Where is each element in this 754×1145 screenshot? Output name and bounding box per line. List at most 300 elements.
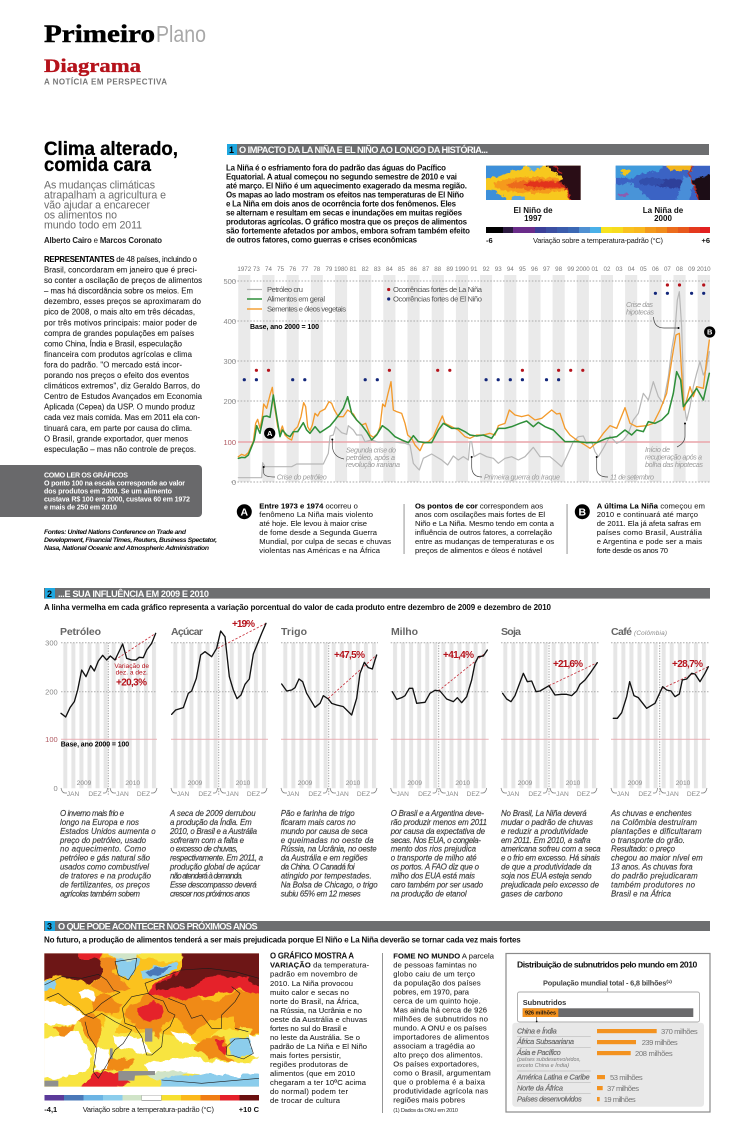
text: Açúcar: não atenderá à demanda. — [170, 871, 243, 880]
text: Açúcar — [169, 809, 264, 898]
year labels: 97 — [543, 266, 550, 273]
intro text: La Niña e El Niño: se alternam e resultam em secas e inundações em muitas regiões — [226, 208, 463, 217]
sources: Nasa, National Oceanic and Atmospheric Administration — [44, 545, 209, 552]
intro text: La Niña e El Niño — [226, 164, 470, 244]
legend: series — [247, 285, 346, 314]
text: Soja: prejudicada pelo excesso de — [500, 880, 600, 889]
text: Café: na Colômbia destruíram — [611, 818, 697, 827]
text: Trigo: subiu 65% em 12 meses — [281, 889, 361, 898]
chart: Petróleo: DEZ — [88, 791, 102, 798]
chart: Trigo: JAN — [336, 791, 349, 798]
year labels: 86 — [410, 266, 418, 273]
text: Milho: mento dos rios prejudica — [391, 845, 477, 854]
article body: REPRESENTANTES de 48 países, incluindo o — [44, 255, 198, 264]
chart: Soja: Soja — [501, 626, 521, 638]
chart: Trigo: +47,5% — [334, 650, 365, 661]
article body: Aplicada (Cepea) da USP. O mundo produz — [44, 403, 195, 412]
map labels — [513, 206, 684, 223]
text: o gráfico mostra a variação: VARIAÇÃO da temperatura- — [270, 961, 369, 970]
chart: Açúcar: DEZ — [198, 791, 212, 798]
text: fome no mundo: alto preço dos alimentos. — [393, 1051, 483, 1060]
text: Açúcar: crescer nos próximos anos — [170, 889, 250, 898]
panel: como ler os gráficos: O ponto 100 na escala corresponde ao valor — [44, 480, 185, 488]
annotation: primeira guerra do Iraque: Primeira guerra do Iraque — [484, 472, 560, 482]
text: fome no mundo — [382, 952, 495, 1114]
note: pontos de cor: preços de alimentos e óleos é notável — [415, 546, 542, 555]
text: Café: também produtores no — [611, 880, 696, 889]
color legend: world map: -4,1 — [44, 1105, 57, 1114]
text: o gráfico mostra a variação: regiões produtoras de — [270, 1060, 348, 1069]
year labels: 87 — [422, 266, 430, 273]
y axis labels for small charts: 0 — [54, 784, 58, 793]
row: África Subsaariana: 239 milhões — [642, 1038, 678, 1047]
chart: Açúcar: 2009 — [188, 780, 203, 787]
row: América Latina e Caribe: América Latina e Caribe — [516, 1072, 590, 1081]
map: La Niña 2000 — [616, 166, 710, 200]
chart: Soja: DEZ — [577, 791, 590, 798]
text: Soja — [500, 809, 601, 898]
year bands — [238, 275, 710, 482]
section 1 header: 1 — [229, 145, 234, 155]
text: fome no mundo: globo caiu de um terço — [393, 970, 475, 979]
article body: so conter a oscilação de preços de alimentos — [44, 276, 202, 285]
text: Milho: o transporte de milho até — [391, 854, 477, 863]
section 2 intro: A linha vermelha em cada gráfico representa a variação porcentual do valor de cada produto entre dezembro de 2009 e dezembro de 2010 — [44, 603, 552, 612]
annotation: crise das hipotecas: hipotecas — [626, 308, 654, 316]
year labels: 83 — [374, 266, 381, 273]
chart: Açúcar — [171, 619, 268, 798]
chart: Soja: +21,6% — [553, 659, 583, 670]
chart: Petróleo: JAN — [67, 791, 79, 798]
chart: Café: (Colômbia) — [634, 630, 667, 637]
text: Petróleo — [59, 809, 156, 898]
text: fome no mundo: produtividade agrícola nas — [393, 1087, 488, 1096]
y axis labels: 300 — [223, 357, 236, 366]
text: Milho: milho dos EUA está mais — [391, 871, 475, 880]
year labels: 02 — [604, 266, 611, 273]
year labels: 76 — [289, 266, 297, 273]
sources: Fontes: United Nations Conference on Trade and — [44, 529, 187, 536]
year labels: 93 — [495, 266, 502, 273]
note B: e Argentina e pode ser a mais — [597, 537, 702, 546]
article body: O Brasil, grande exportador, quer menos — [44, 434, 188, 443]
panel: como ler os gráficos: custava R$ 100 em 2000, custava 60 em 1972 — [44, 496, 190, 504]
y axis labels for small charts — [45, 638, 58, 793]
chart: Café: +28,7% — [672, 659, 703, 670]
year labels: 88 — [434, 266, 442, 273]
map labels: 2000 — [654, 214, 672, 223]
chart: Açúcar: DEZ — [247, 791, 260, 798]
chart: Soja: JAN — [507, 791, 519, 798]
dots: El Niño — [243, 292, 705, 381]
text: o gráfico mostra a variação: do normal) podem ter — [270, 1087, 348, 1096]
text: Trigo: mundo por causa de seca — [281, 827, 368, 836]
article body — [44, 255, 203, 454]
line: alimentos em geral — [238, 372, 709, 458]
year labels: 74 — [265, 266, 272, 273]
sources: Development, Financial Times, Reuters, Business Spectator, — [44, 537, 217, 544]
panel title: Distribuição de subnutridos pelo mundo em 2010 — [517, 960, 698, 970]
year labels: 07 — [664, 266, 671, 273]
note: pontos de cor: anos com oscilações mais fortes de El — [415, 510, 545, 519]
annotation: crise das hipotecas: Crise das — [626, 300, 653, 309]
year labels: 96 — [531, 266, 538, 273]
note B: A última La Niña começou em — [597, 501, 705, 510]
article body: fora do padrão. "O mercado está incor- — [44, 360, 182, 370]
note B: 2010 e continuará até março — [597, 510, 698, 519]
text: Trigo: Na Bolsa de Chicago, o trigo — [281, 880, 378, 889]
text: fome no mundo: de pessoas famintas no — [393, 961, 477, 970]
note B: forte desde os anos 70 — [597, 546, 668, 555]
article body: porando nos preços o efeito dos eventos — [44, 371, 189, 380]
panel: como ler os gráficos: dos produtos em 2000. Se um alimento — [44, 488, 173, 496]
row: Norte da África: 37 milhões — [607, 1084, 639, 1093]
text: Petróleo: de fertilizantes, os preços — [60, 880, 150, 889]
text: Petróleo: petróleo e gás natural são — [59, 854, 151, 863]
row: Norte da África — [517, 1083, 639, 1093]
year labels — [237, 266, 711, 273]
article body: especulação – mas não controle de preços. — [44, 445, 196, 454]
text: fome no mundo: mundo. A ONU e os países — [393, 1024, 487, 1033]
subheadline: os alimentos no — [44, 209, 117, 221]
chart: Trigo: 2009 — [298, 780, 313, 787]
chart: Petróleo: 2009 — [77, 780, 92, 787]
text: Milho: rão produzir menos em 2011 — [391, 818, 487, 827]
note: pontos de cor: entre as mudanças de temperaturas e os — [415, 537, 554, 546]
article body: financeira com produtos agrícolas e clima — [44, 350, 193, 359]
chart: Milho: DEZ — [418, 791, 431, 798]
text: Café: o transporte do grão. — [611, 836, 685, 845]
annotation: segunda crise do petróleo: petróleo, após a — [345, 453, 395, 462]
text: Café — [610, 809, 703, 898]
note B: B — [579, 506, 587, 518]
text: Soja: gases de carbono — [501, 889, 563, 898]
text: Açúcar: produção global de açúcar — [169, 862, 260, 872]
annotation: primeira guerra do Iraque — [471, 456, 560, 482]
text: Soja: e reduzir a produtividade — [501, 827, 589, 836]
bar: subnutridos: 926 milhões — [525, 1011, 556, 1017]
section 2 header — [44, 588, 710, 599]
year labels: 73 — [253, 266, 260, 273]
note A: fenômeno La Niña mais violento — [259, 510, 373, 519]
text: Café: chegou ao maior nível em — [611, 854, 703, 863]
chart: Trigo: Trigo — [281, 626, 307, 638]
year labels: 85 — [398, 266, 405, 273]
chart: Soja: 2010 — [566, 780, 581, 787]
headline: comida cara — [44, 155, 151, 176]
year labels: 75 — [277, 266, 285, 273]
text: Milho — [390, 809, 487, 898]
year labels: 03 — [616, 266, 623, 273]
text: Soja: No Brasil, La Niña deverá — [501, 809, 587, 818]
year labels: 79 — [325, 266, 333, 273]
chart: Milho: JAN — [446, 791, 459, 798]
annotation: recuperação: bolha das hipotecas — [645, 460, 703, 469]
text: fome no mundo: da população dos países — [393, 979, 481, 988]
byline: Alberto Cairo e Marcos Coronato — [44, 236, 162, 245]
chart: Café: 2010 — [676, 780, 691, 787]
chart: Petróleo: JAN — [116, 791, 129, 798]
text: Açúcar: o excesso de chuvas, — [170, 845, 238, 854]
intro text: La Niña e El Niño: Equatorial. A atual começou no segundo semestre de 2010 e vai — [226, 173, 457, 182]
section 2 header: 2 — [47, 589, 52, 599]
chart: Açúcar: JAN — [177, 791, 189, 798]
text: Trigo: e queimadas no oeste da — [281, 836, 374, 845]
chart: Milho: Milho — [391, 626, 418, 638]
text: Trigo: atingido por tempestades. — [281, 871, 372, 880]
marker A — [264, 428, 275, 439]
year labels: 92 — [483, 266, 490, 273]
y axis labels: 0 — [232, 478, 236, 487]
article body: – mas há discordância sobre os meios. Em — [44, 287, 193, 296]
article body: como China, Índia e Brasil, especulação — [44, 339, 183, 348]
y axis labels for small charts: 300 — [45, 638, 58, 648]
note A: até hoje. Ele levou à maior crise — [259, 519, 367, 528]
article body: cada vez mais comida. Mas em 2011 ela con- — [44, 413, 200, 422]
text: fome no mundo: importadores de alimentos — [393, 1033, 489, 1042]
text: Açúcar: Esse descompasso deverá — [170, 880, 257, 889]
row: Países desenvolvidos — [517, 1094, 636, 1104]
color scale: temperature: Variação sobre a temperatura-padrão (°C) — [533, 236, 664, 245]
color scale: temperature: -6 — [486, 236, 493, 245]
note A: Entre 1973 e 1974 ocorreu o — [259, 501, 358, 510]
text: o gráfico mostra a variação: fortes no sul do Brasil e — [270, 1024, 347, 1033]
text: Soja: mudar o padrão de chuvas — [501, 818, 593, 827]
subheadline: vão ajudar a encarecer — [44, 199, 150, 211]
annotation: segunda crise do petróleo: revolução iraniana — [346, 460, 400, 469]
y axis labels — [223, 277, 236, 487]
text: Soja: de que a produtividade da — [501, 862, 592, 872]
row: Ásia e Pacífico: exceto China e Índia) — [517, 1062, 569, 1069]
text: o gráfico mostra a variação: padrão de La Niña e El Niño — [270, 1042, 367, 1051]
row: América Latina e Caribe: 53 milhões — [610, 1073, 643, 1082]
section 3 header — [44, 920, 710, 931]
color legend: world map: +10 C — [239, 1105, 260, 1114]
year labels: 01 — [591, 266, 599, 273]
year labels: 04 — [628, 266, 635, 273]
panel: como ler os gráficos — [0, 465, 202, 517]
y axis labels: 200 — [223, 397, 236, 406]
chart: Café: JAN — [617, 791, 629, 798]
y axis labels for small charts: 200 — [45, 688, 58, 696]
text: Milho: os portos. A FAO diz que o — [391, 862, 480, 872]
row: China e Índia — [517, 1026, 698, 1036]
year labels: 82 — [362, 266, 369, 273]
section 3 header: O QUE PODE ACONTECER NOS PRÓXIMOS ANOS — [58, 920, 258, 931]
text: fome no mundo: (1) Dados da ONU em 2010 — [393, 1108, 458, 1114]
text: fome no mundo: Os países exportadores, — [393, 1060, 479, 1069]
year labels: 2010 — [697, 266, 711, 273]
chart: Café: DEZ — [687, 791, 700, 798]
chart: Petróleo: Variação de — [114, 663, 149, 670]
text: Açúcar: sofreram com a falta e — [170, 836, 245, 845]
note A — [237, 501, 391, 555]
text: Café: Resultado: o preço — [611, 845, 676, 854]
article body: Centro de Estudos Avançados em Economia — [44, 392, 203, 401]
text: fome no mundo: FOME NO MUNDO A parcela — [393, 952, 495, 961]
chart: Petróleo — [60, 626, 157, 798]
text: Trigo: da Austrália e em regiões — [281, 854, 368, 863]
chart: Soja: DEZ — [528, 791, 542, 798]
text: o gráfico mostra a variação: norte do Brasil, na África, — [270, 997, 359, 1006]
text: o gráfico mostra a variação: padrão em novembro de — [270, 970, 358, 979]
note A: de fome desde a Segunda Guerra — [259, 528, 378, 537]
year labels: 94 — [507, 266, 514, 273]
row: Ásia e Pacífico: (países subdesenvolvidos, — [517, 1057, 581, 1063]
text: Petróleo: Estados Unidos aumenta o — [60, 827, 156, 836]
section 3 intro: No futuro, a produção de alimentos tenderá a ser mais prejudicada porque El Niño e La Niña deverão se tornar cada vez mais fortes — [44, 936, 521, 945]
world temperature map — [44, 953, 259, 1087]
text: Açúcar: respectivamente. Em 2011, a — [170, 854, 264, 863]
chart: Trigo: JAN — [287, 791, 299, 798]
text: Milho: caro também por ser usado — [391, 880, 484, 889]
year labels: 06 — [652, 266, 659, 273]
y axis labels for small charts: 100 — [45, 735, 58, 744]
year labels: 09 — [688, 266, 696, 273]
row: China e Índia: 370 milhões — [661, 1027, 698, 1036]
text: Soja: e o frio em excesso. Há sinais — [501, 854, 600, 863]
chart: Petróleo: Base, ano 2000 = 100 — [61, 742, 129, 749]
annotation: 11 de setembro: 11 de setembro — [610, 472, 654, 482]
text: Café: Brasil e na África — [611, 889, 672, 898]
text: Café: plantações e dificultaram — [610, 827, 702, 836]
text: Trigo: Rússia, na Ucrânia, no oeste — [281, 845, 377, 854]
annotation: crise das hipotecas — [626, 300, 680, 329]
year labels: 1972 — [237, 266, 252, 273]
intro text: La Niña e El Niño: Os mapas ao lado mostram os efeitos nas temperaturas de El Niño — [226, 190, 464, 200]
subheadline: atrapalham a agricultura e — [44, 189, 166, 201]
chart: Açúcar: +19% — [232, 619, 255, 630]
chart: Milho: 2010 — [455, 780, 470, 787]
text: Petróleo: longo na Europa e nos — [60, 818, 139, 827]
marker B — [704, 326, 715, 338]
chart: Açúcar: JAN — [226, 791, 239, 798]
article body: climáticos extremos", diz Geraldo Barros, do — [44, 382, 201, 391]
year labels: 78 — [313, 266, 321, 273]
text: fome no mundo: milhões de subnutridos no — [393, 1015, 488, 1024]
row: Países desenvolvidos: Países desenvolvidos — [517, 1094, 582, 1103]
year labels: 99 — [567, 266, 575, 273]
chart: Soja: JAN — [556, 791, 569, 798]
note: pontos de cor: influência de outros fatores, a correlação — [415, 528, 552, 537]
intro text: La Niña e El Niño: e La Niña em dois anos de ocorrência forte dos fenômenos. Eles — [226, 200, 457, 208]
annotation: crise do petróleo — [263, 466, 327, 482]
annotation: segunda crise do petróleo — [331, 438, 400, 469]
chart: Café — [611, 626, 710, 798]
y axis labels: 500 — [223, 277, 236, 286]
intro text: La Niña e El Niño: são fortemente afetados por ambos, embora sofram também efeito — [226, 226, 470, 235]
text: o gráfico mostra a variação: muito calor e secas no — [270, 988, 349, 997]
year labels: 2000 — [576, 266, 590, 273]
text: Petróleo: de tratores e na produção — [60, 871, 152, 880]
text: Milho: na produção de etanol — [391, 889, 467, 898]
text: Milho: por causa da expectativa de — [390, 827, 486, 836]
text: Petróleo: preço do petróleo, usado — [59, 836, 147, 845]
panel: como ler os gráficos: COMO LER OS GRÁFICOS — [44, 470, 128, 480]
note B — [567, 501, 705, 555]
article body: dezembro, esses preços se aproximaram do — [44, 297, 202, 306]
year labels: 91 — [471, 266, 478, 273]
text: o gráfico mostra a variação: na Rússia, na Ucrânia e no — [270, 1006, 362, 1015]
marker A: A — [267, 429, 273, 438]
text: Café: do padrão prejudicaram — [611, 871, 698, 880]
text: o gráfico mostra a variação: O GRÁFICO MOSTRA A — [270, 952, 354, 961]
chart: Trigo — [281, 626, 378, 798]
year labels: 81 — [350, 266, 357, 273]
sources — [44, 529, 217, 552]
legend: series: Alimentos em geral — [267, 294, 325, 304]
chart: Petróleo: DEZ — [137, 791, 150, 798]
year labels: 77 — [301, 266, 309, 273]
article body: tinuará cara, em parte por causa do clima. — [44, 424, 192, 433]
article body: compra de grandes populações em países — [44, 329, 194, 338]
text: Milho: secas. Nos EUA, o congela- — [391, 836, 481, 845]
text: Petróleo: no aquecimento. Como — [60, 845, 147, 854]
subheadline: As mudanças climáticas — [44, 179, 155, 191]
row: Países desenvolvidos: 19 milhões — [604, 1095, 636, 1104]
chart: Trigo: DEZ — [357, 791, 370, 798]
chart: Petróleo: 2010 — [125, 780, 140, 787]
year labels: 05 — [640, 266, 647, 273]
note A: violentas nas Américas e na África — [259, 546, 381, 555]
text: Trigo: ficaram mais caros no — [281, 818, 356, 827]
legend: dots: Ocorrências fortes de El Niño — [393, 294, 482, 304]
main line chart: prices 1972-2010 — [223, 266, 715, 487]
section 1 header — [227, 144, 709, 155]
text: o gráfico mostra a variação: no leste da Austrália. Se o — [270, 1033, 360, 1042]
text: Açúcar: a produção da Índia. Em — [170, 818, 252, 827]
text: fome no mundo: Mas ainda há cerca de 926 — [393, 1006, 487, 1015]
text: o gráfico mostra a variação — [270, 952, 369, 1105]
text: Soja: soja nos EUA esteja sendo — [501, 871, 592, 880]
row: Ásia e Pacífico: Ásia e Pacífico — [516, 1048, 561, 1057]
annotation: segunda crise do petróleo: Segunda crise do — [346, 446, 396, 454]
text: fome no mundo: regiões mais pobres — [393, 1096, 465, 1105]
text: o gráfico mostra a variação: alimentos (que em 2010 — [270, 1069, 355, 1078]
text: Café: 13 anos. As chuvas fora — [611, 862, 693, 872]
chart: Petróleo: dez. a dez. — [116, 670, 148, 676]
chart: Petróleo: Petróleo — [60, 626, 101, 638]
text: o gráfico mostra a variação: 2010. La Niña provocou — [270, 979, 353, 988]
legend: series: Sementes e óleos vegetais — [267, 304, 346, 314]
row: África Subsaariana — [516, 1037, 678, 1047]
bar: subnutridos — [523, 998, 693, 1017]
row: Ásia e Pacífico: 208 milhões — [635, 1049, 673, 1058]
intro text: La Niña e El Niño: La Niña é o esfriamento fora do padrão das águas do Pacífico — [226, 164, 446, 173]
text: Soja: americana sofreu com a seca — [501, 845, 601, 854]
year labels: 95 — [519, 266, 526, 273]
chart: Café: 2009 — [628, 780, 643, 787]
text: fome no mundo: associam a tragédia ao — [393, 1042, 475, 1051]
annotation: crise do petróleo: Crise do petróleo — [277, 472, 327, 482]
chart: Soja — [501, 626, 599, 798]
map labels: 1997 — [524, 214, 542, 223]
text: Petróleo: agrícolas também sobem — [60, 889, 140, 898]
text: fome no mundo: pobres, em 1970, para — [393, 988, 470, 997]
year labels: 08 — [676, 266, 683, 273]
section name: Diagrama: A NOTÍCIA EM PERSPECTIVA — [44, 78, 167, 87]
note B: países como Brasil, Austrália — [597, 528, 703, 537]
chart: Café: JAN — [666, 791, 679, 798]
bar: subnutridos: Subnutridos — [523, 998, 566, 1007]
chart: Milho: 2009 — [407, 780, 422, 787]
section 3 header: 3 — [47, 921, 52, 931]
headline — [44, 139, 178, 176]
text: o gráfico mostra a variação: oeste da Austrália e chuvas — [270, 1015, 367, 1024]
marker B: B — [707, 328, 713, 337]
color scale: temperature — [486, 227, 710, 245]
annotation: recuperação: Início de — [645, 445, 670, 454]
